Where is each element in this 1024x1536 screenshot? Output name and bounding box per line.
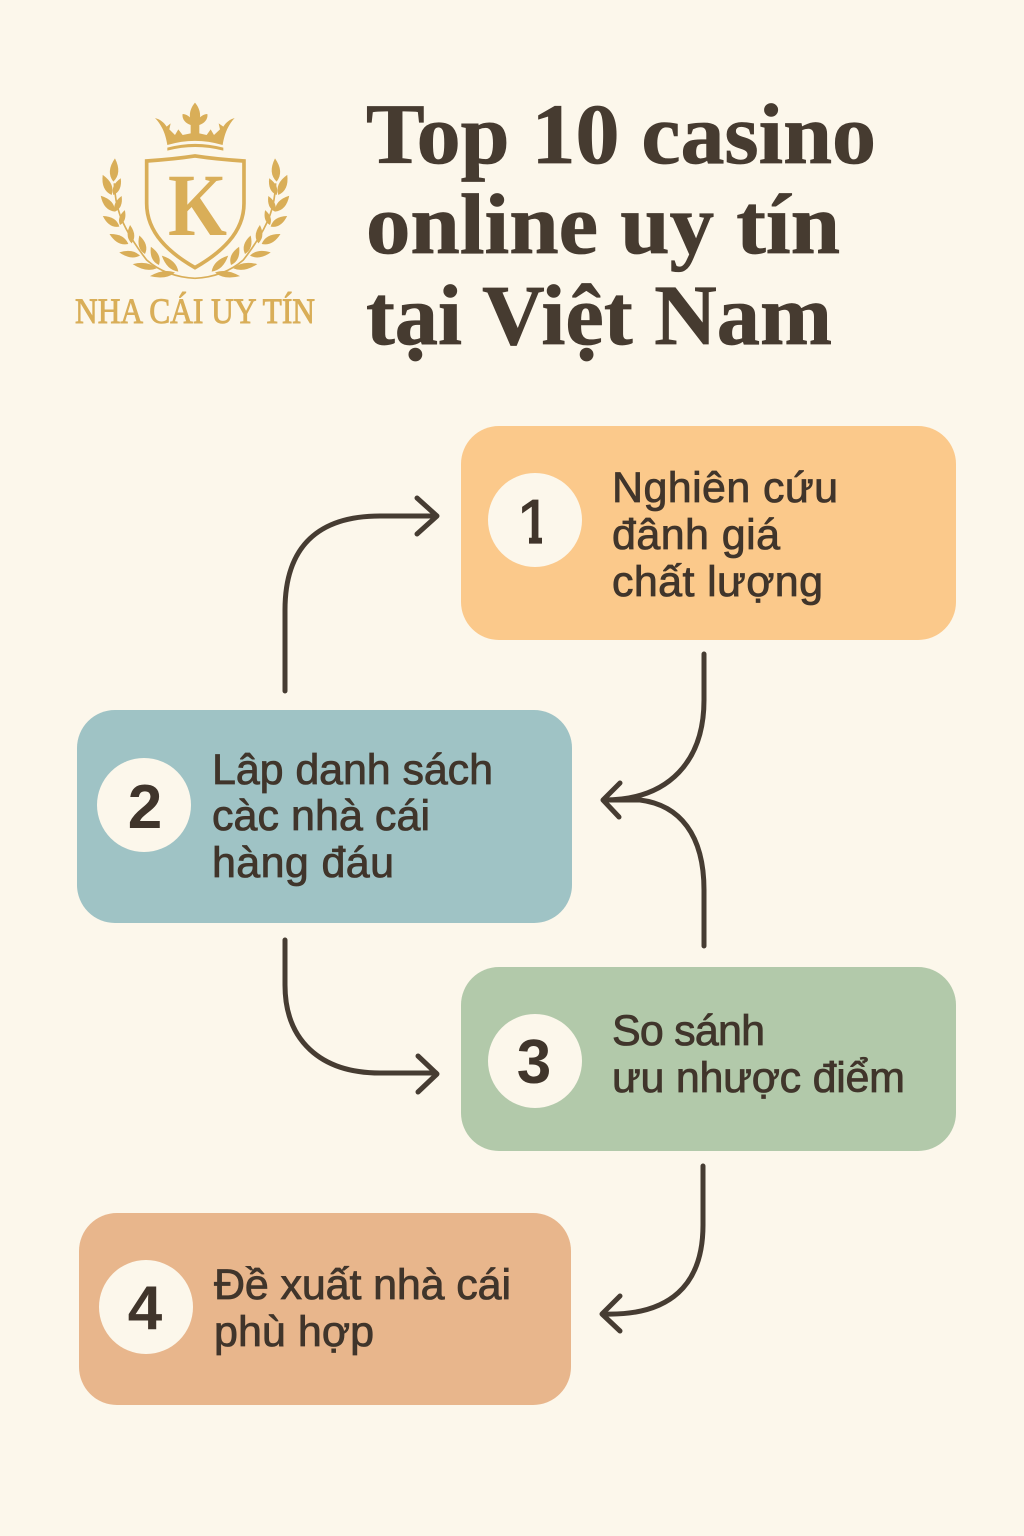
arrow: step 3 down to step 4 [602,1166,703,1331]
step 1 text: đânh giá [612,511,780,559]
icon: laurel wreath [98,158,292,279]
icon: crest with crown, shield and laurels [98,103,292,279]
number badge 4: 4 [128,1274,163,1343]
step 4 text: phù hợp [214,1308,374,1356]
step 3 text: ưu nhược điểm [612,1054,905,1102]
step 4 text: Đề xuất nhà cái [214,1261,511,1309]
title: online uy tín [366,176,840,272]
logo: Nhà Cái Uy Tín crest [75,103,315,331]
step 3 text [612,1007,905,1102]
icon: letter K: K [168,157,227,255]
step 2 text: hàng đáu [212,839,394,887]
panel: step 4 [79,1213,571,1405]
number badge 1 [488,473,582,567]
icon: shield [147,156,244,268]
arrow: step 1 down to step 2 [603,654,704,817]
panel: step 2 [77,710,572,923]
step 4 text [214,1261,511,1356]
number badge 3: 3 [517,1028,551,1097]
title: tại Việt Nam [366,267,832,363]
title: Top 10 casino [366,86,876,182]
step 2 text [212,746,493,887]
title [366,86,876,363]
number badge 2: 2 [128,773,162,842]
number badge 3 [488,1014,582,1108]
step 2 text: càc nhà cái [212,792,430,840]
panel: step 1 [461,426,956,640]
arrow: step 2 down to step 3 [285,940,437,1092]
icon: crown [155,103,235,151]
number badge 2 [97,758,191,852]
panel: step 3 [461,967,956,1151]
number badge 1: 1 [517,488,551,557]
arrow: step 3 up to step 2 [606,800,704,946]
step 1 text [612,464,838,606]
number badge 4 [99,1260,193,1354]
step 1 text: chất lượng [612,558,823,606]
arrow: step 2 up to step 1 [285,498,437,691]
step 1 text: Nghiên cứu [612,464,838,512]
step 3 text: So sánh [612,1007,765,1055]
logo wordmark: NHA CÁI UY TÍN [75,291,315,331]
step 2 text: Lâp danh sách [212,746,493,794]
